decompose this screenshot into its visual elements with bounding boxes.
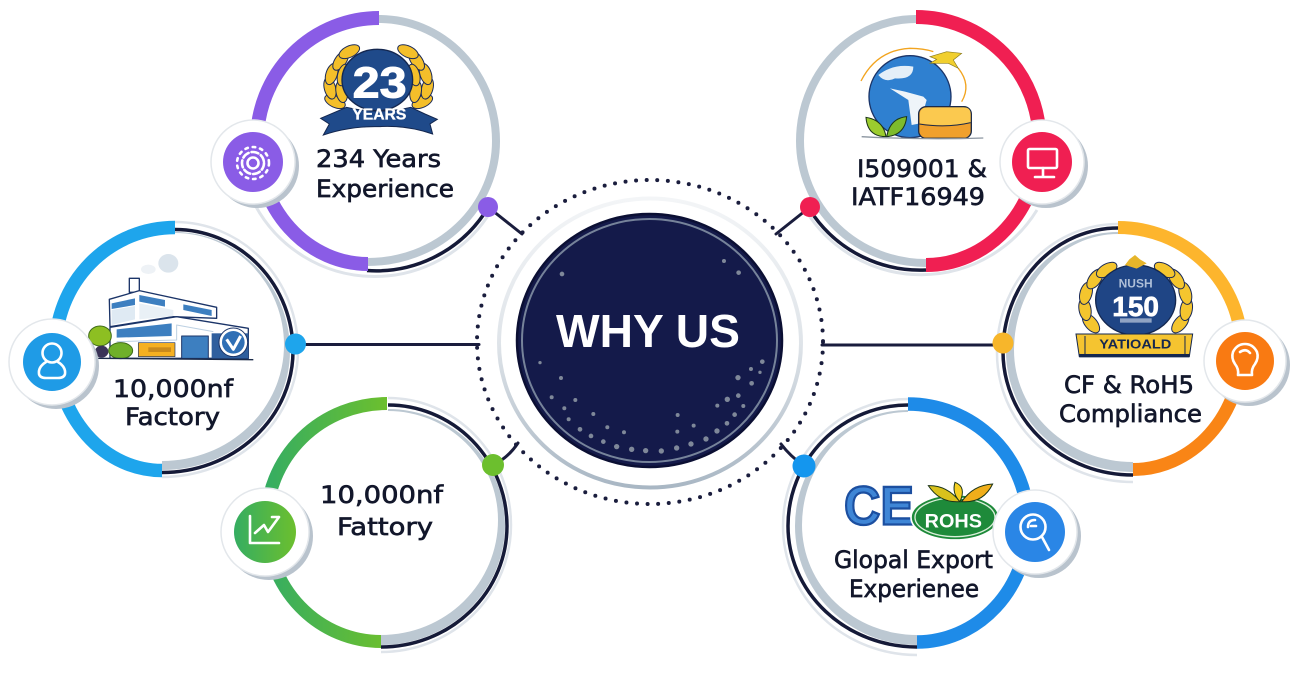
label [851, 155, 987, 211]
white halo ring [499, 198, 801, 488]
connector lines [296, 207, 1003, 466]
icon badge: gear swirl [211, 120, 299, 208]
icon badge: monitor [1000, 120, 1088, 208]
node dot [992, 332, 1014, 354]
panel: global export [783, 399, 1081, 655]
ring [56, 222, 298, 477]
illustration: CE and RoHS marks: CE [844, 475, 914, 537]
icon badge: magnifier [993, 490, 1081, 578]
panel: compliance badge [992, 224, 1290, 482]
panel: factory [9, 222, 306, 477]
node dot [792, 454, 816, 478]
label [834, 546, 993, 603]
panel: years experience [211, 18, 498, 276]
illustration: 150 laurel badge: 150 [1112, 291, 1159, 322]
label: Fattory [337, 513, 433, 541]
speckles [538, 259, 765, 454]
label: Glopal Export [834, 546, 993, 574]
icon badge: light bulb [1204, 320, 1290, 406]
label [320, 481, 444, 541]
label [316, 145, 454, 203]
heading: why us: WHY US [556, 305, 740, 357]
label: Compliance [1059, 400, 1202, 428]
illustration: 150 laurel badge: YATIOALD [1099, 336, 1172, 351]
label [1059, 371, 1202, 428]
central hub [477, 180, 823, 504]
node dot [285, 334, 306, 354]
illustration: factory building [89, 254, 253, 360]
label [113, 375, 234, 431]
ring [266, 398, 511, 652]
label: Experienee [849, 575, 979, 603]
illustration: 150 laurel badge [1076, 255, 1194, 357]
icon badge: person [9, 319, 99, 409]
illustration: 23 years badge [321, 42, 437, 135]
illustration: 150 laurel badge: NUSH [1119, 276, 1153, 290]
panel: factory second [221, 398, 511, 652]
node dot [478, 197, 498, 217]
label: IATF16949 [851, 183, 985, 211]
illustration: globe and package [861, 48, 983, 139]
dark disk [517, 214, 782, 467]
illustration: 23 years badge: YEARS [352, 107, 406, 124]
ring [783, 399, 1028, 655]
ring [997, 224, 1242, 482]
icon badge: chart [221, 488, 313, 580]
dotted orbit [477, 180, 823, 504]
ring [255, 18, 496, 276]
label: I509001 & [857, 155, 987, 183]
node dot [800, 197, 820, 217]
illustration: CE and RoHS marks: ROHS [925, 511, 982, 532]
panel: iso certification [800, 17, 1088, 275]
node dot [482, 454, 504, 476]
illustration: 23 years badge: 23 [353, 59, 407, 107]
illustration: CE and RoHS marks [844, 475, 999, 540]
ring [800, 17, 1040, 275]
label: 10,000nf [320, 481, 444, 509]
label: Factory [125, 403, 220, 431]
label: Experience [316, 175, 454, 203]
label: 10,000nf [113, 375, 234, 403]
inner ring [522, 219, 777, 462]
label: CF & RoH5 [1064, 371, 1194, 399]
label: 234 Years [316, 145, 441, 173]
